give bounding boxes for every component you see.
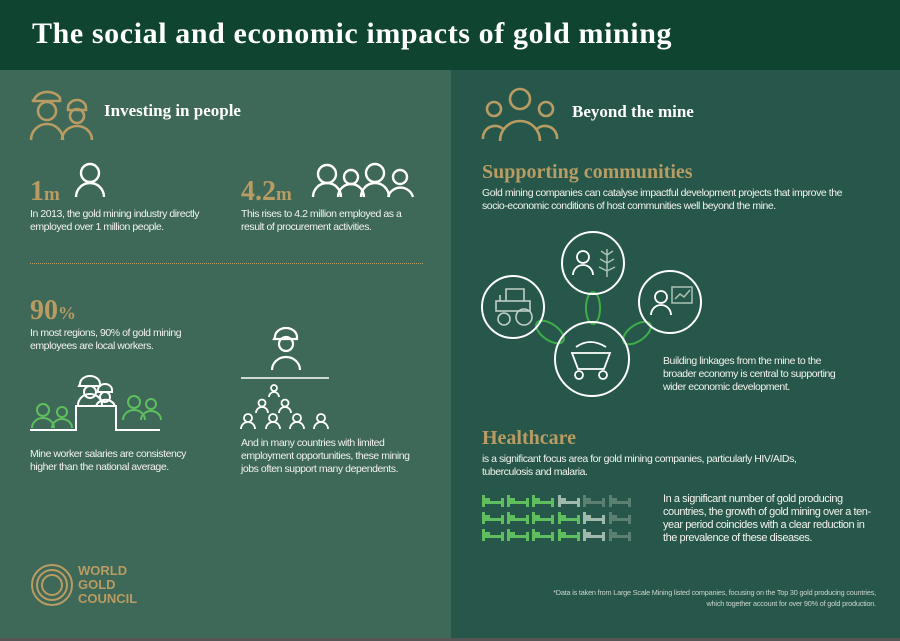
heading: investing in people: Investing in people	[104, 101, 241, 120]
panel: beyond the mine	[451, 70, 900, 638]
logo: world gold council: COUNCIL	[78, 591, 137, 606]
panel: investing in people	[0, 70, 451, 638]
logo: world gold council: WORLD	[78, 563, 127, 578]
stat: 4.2m: This rises to 4.2 million employed as a result of procurement activities.	[241, 208, 401, 233]
heading: healthcare: Healthcare	[482, 427, 576, 449]
stat: 90%: In most regions, 90% of gold mining employees are local workers.	[30, 327, 181, 352]
text: dependents: And in many countries with limited employment opportunities, these mining jobs often support many dependents.	[241, 437, 410, 475]
text: linkages: Building linkages from the mine to the broader economy is central to supporting wider economic development.	[663, 355, 835, 393]
logo: world gold council: GOLD	[78, 577, 116, 592]
stat: 1m: In 2013, the gold mining industry directly employed over 1 million people.	[30, 208, 199, 233]
heading: beyond the mine: Beyond the mine	[572, 102, 694, 121]
stat: 90%: 90%	[30, 295, 76, 326]
icon: miners	[30, 90, 94, 140]
stat: 4.2m: 4.2m	[241, 176, 292, 207]
heading: supporting communities: Supporting communities	[482, 161, 693, 183]
footnote: *Data is taken from Large Scale Mining listed companies, focusing on the Top 30 gold producing countries, which together account for over 90% of gold production.	[553, 588, 876, 608]
text: disease reduction: In a significant number of gold producing countries, the growth of gold mining over a ten-year period coincides with a clear reduction in the prevalence of these diseases.	[663, 493, 871, 544]
icon: salary podium	[30, 375, 162, 431]
text: supporting communities: Gold mining companies can catalyse impactful development projects that improve the socio-economic conditions of host communities well beyond the mine.	[482, 187, 842, 212]
stat: 1m: 1m	[30, 176, 60, 207]
icon grid: hospital beds	[482, 495, 631, 541]
icon: community	[482, 88, 558, 141]
logo: world gold council	[31, 563, 137, 606]
stat: 90%	[30, 295, 181, 352]
header	[0, 0, 900, 70]
stat: 4.2m	[241, 162, 414, 233]
text: salaries: Mine worker salaries are consistency higher than the national average.	[30, 448, 186, 473]
title: The social and economic impacts of gold mining	[32, 17, 672, 50]
text: healthcare: is a significant focus area for gold mining companies, particularly HIV/AIDs, tuberculosis and malaria.	[482, 453, 796, 478]
stat: 1m	[30, 162, 200, 233]
diagram: linkages	[481, 231, 702, 397]
icon: dependents	[240, 326, 329, 429]
